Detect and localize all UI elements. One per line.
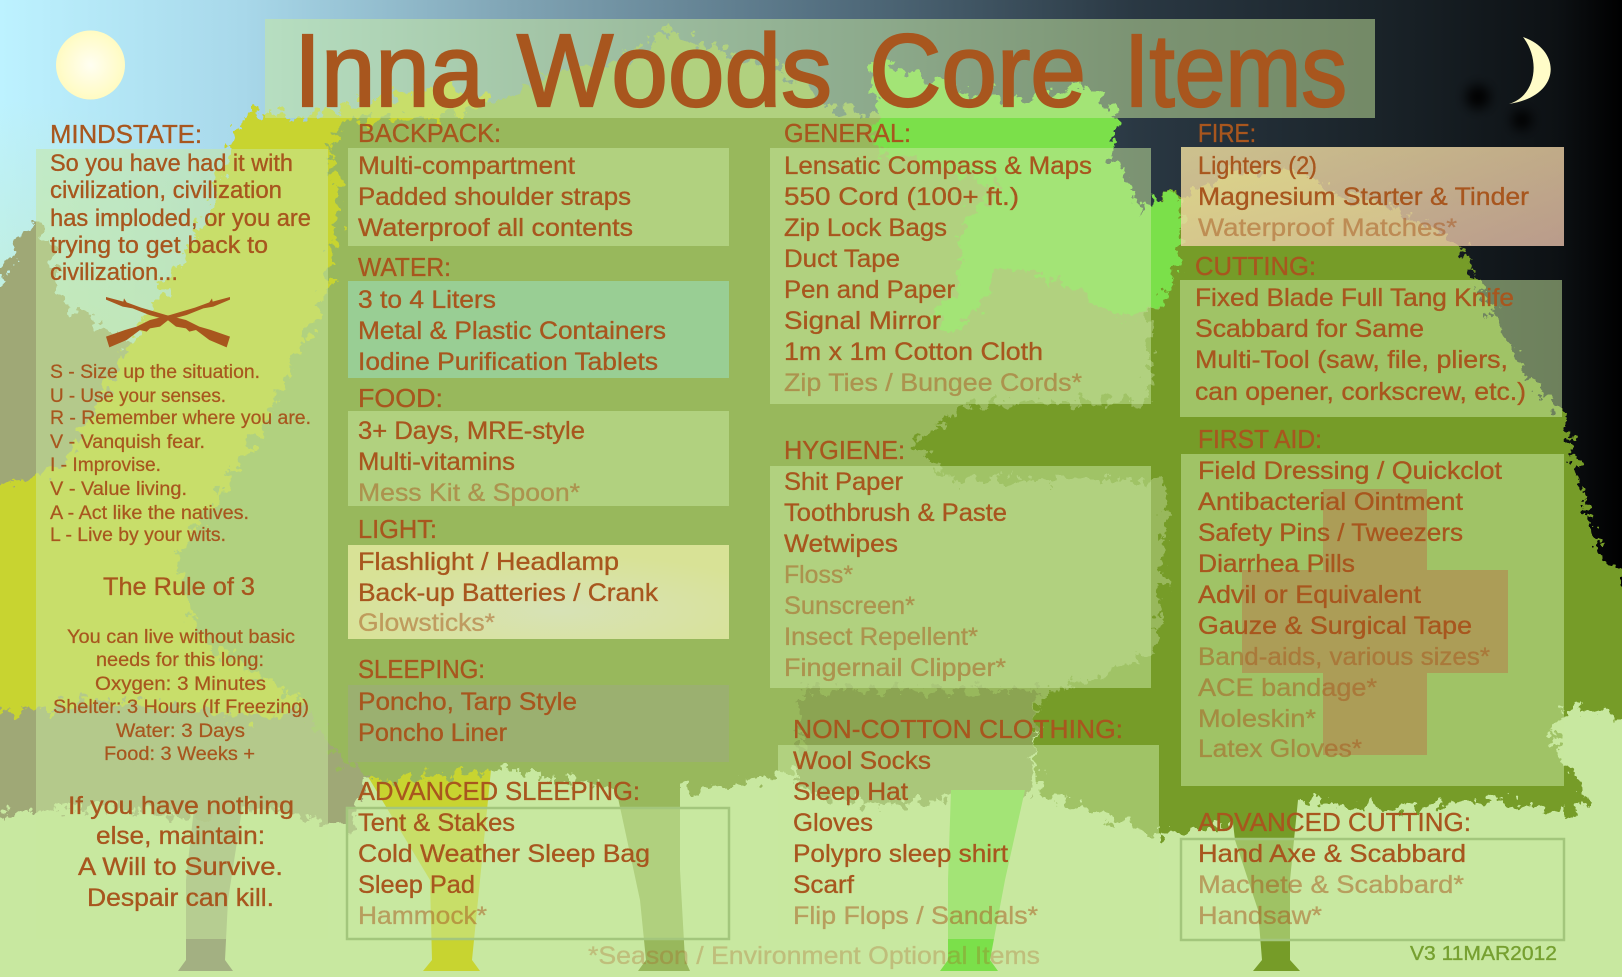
- panel: water: Iodine Purification Tablets: [358, 348, 658, 376]
- title: Items: [1124, 13, 1347, 128]
- version stamp: V3 11MAR2012: [1410, 943, 1557, 965]
- panel: non-cotton clothing: [778, 714, 1159, 939]
- text: intro: [50, 150, 311, 286]
- panel: food: Mess Kit & Spoon*: [358, 479, 580, 507]
- text: will to survive: If you have nothing: [68, 792, 294, 820]
- tree: grey lower canopy: [0, 700, 372, 830]
- panel: first aid: Moleskin*: [1198, 705, 1316, 733]
- panel: water: [348, 252, 729, 378]
- text: SURVIVAL mnemonic: L - Live by your wits.: [50, 525, 226, 546]
- icon: first aid cross: [1242, 489, 1508, 755]
- panel: advanced sleeping: Tent & Stakes: [358, 809, 515, 837]
- panel: non-cotton clothing: Flip Flops / Sandals*: [793, 902, 1038, 930]
- panel: cutting: [1180, 251, 1562, 417]
- panel: sleeping: Poncho Liner: [358, 719, 507, 747]
- panel: first aid: Advil or Equivalent: [1198, 581, 1421, 609]
- panel: water: WATER:: [358, 252, 451, 282]
- panel: water: Metal & Plastic Containers: [358, 317, 666, 345]
- panel: backpack: BACKPACK:: [358, 118, 501, 148]
- tree: olive dark lower foliage: [800, 690, 1036, 805]
- text: will to survive: else, maintain:: [96, 822, 265, 850]
- panel: non-cotton clothing: Gloves: [793, 809, 873, 837]
- panel: first aid: Field Dressing / Quickclot: [1198, 457, 1502, 485]
- panel: hygiene: Sunscreen*: [784, 592, 915, 620]
- panel: fire: Magnesium Starter & Tinder: [1198, 183, 1529, 211]
- panel: general: Signal Mirror: [784, 307, 941, 335]
- tree: dark green mid foliage: [915, 270, 1182, 480]
- panel: advanced cutting: Hand Axe & Scabbard: [1198, 840, 1466, 868]
- text: intro: civilization, civilization: [50, 177, 282, 204]
- icon: sun: [56, 30, 125, 100]
- panel: hygiene: Floss*: [784, 561, 853, 589]
- text: SURVIVAL mnemonic: R - Remember where you are.: [50, 408, 311, 429]
- panel: first aid: [1181, 424, 1564, 786]
- panel: fire: [1181, 118, 1564, 246]
- panel: hygiene: Shit Paper: [784, 468, 903, 496]
- panel: cutting: can opener, corkscrew, etc.): [1195, 378, 1526, 406]
- tree: olive: [175, 30, 1172, 971]
- text: rule of 3: [53, 627, 309, 765]
- panel: advanced cutting: Machete & Scabbard*: [1198, 871, 1464, 899]
- text: will to survive: A Will to Survive.: [78, 853, 283, 881]
- panel: sleeping: SLEEPING:: [358, 654, 485, 684]
- panel: non-cotton clothing: Scarf: [793, 871, 854, 899]
- panel: sleeping: Poncho, Tarp Style: [358, 688, 577, 716]
- panel: advanced sleeping: ADVANCED SLEEPING:: [358, 776, 640, 806]
- text: rule of 3: Water: 3 Days: [116, 721, 245, 742]
- heading: mindstate: MINDSTATE:: [50, 119, 202, 149]
- text: SURVIVAL mnemonic: S - Size up the situation.: [50, 362, 260, 383]
- panel: sleeping: [348, 654, 729, 762]
- panel: light: Flashlight / Headlamp: [358, 548, 619, 576]
- panel: first aid: FIRST AID:: [1198, 424, 1322, 454]
- panel: general: Zip Lock Bags: [784, 214, 947, 242]
- panel: hygiene: Fingernail Clipper*: [784, 654, 1006, 682]
- panel: cutting: Multi-Tool (saw, file, pliers,: [1195, 346, 1508, 374]
- text: SURVIVAL mnemonic: V - Value living.: [50, 479, 187, 500]
- panel: backpack: Padded shoulder straps: [358, 183, 631, 211]
- panel: mindstate: [36, 119, 328, 939]
- text: rule of 3: You can live without basic: [67, 627, 295, 648]
- panel: advanced sleeping: Hammock*: [358, 902, 487, 930]
- panel: general: 1m x 1m Cotton Cloth: [784, 338, 1043, 366]
- panel: general: [770, 118, 1151, 404]
- panel: non-cotton clothing: NON-COTTON CLOTHING:: [793, 714, 1123, 744]
- panel: advanced cutting: Handsaw*: [1198, 902, 1322, 930]
- text: intro: trying to get back to: [50, 232, 268, 259]
- footnote: season optional items: *Season / Environment Optional Items: [588, 942, 1040, 970]
- title: Woods: [517, 13, 832, 128]
- tree: dark green: [1030, 168, 1622, 971]
- panel: backpack: Multi-compartment: [358, 152, 575, 180]
- panel: first aid: Gauze & Surgical Tape: [1198, 612, 1472, 640]
- text: rule of 3: needs for this long:: [96, 650, 264, 671]
- text: will to survive: Despair can kill.: [87, 884, 274, 912]
- panel: fire: FIRE:: [1198, 118, 1256, 148]
- panel: advanced cutting: ADVANCED CUTTING:: [1198, 807, 1471, 837]
- panel: general: Lensatic Compass & Maps: [784, 152, 1092, 180]
- panel: hygiene: [770, 435, 1151, 688]
- panel: first aid: Diarrhea Pills: [1198, 550, 1355, 578]
- panel: hygiene: Wetwipes: [784, 530, 898, 558]
- text: rule of 3: Oxygen: 3 Minutes: [95, 674, 266, 695]
- panel: light: LIGHT:: [358, 514, 437, 544]
- panel: food: Multi-vitamins: [358, 448, 515, 476]
- text: intro: has imploded, or you are: [50, 205, 311, 232]
- text: will to survive: [68, 792, 294, 912]
- panel: light: [348, 514, 729, 639]
- text: SURVIVAL mnemonic: V - Vanquish fear.: [50, 432, 205, 453]
- panel: advanced cutting: [1181, 807, 1564, 940]
- text: SURVIVAL mnemonic: A - Act like the natives.: [50, 503, 249, 524]
- text: SURVIVAL mnemonic: [50, 362, 311, 546]
- tree: yellow: [0, 85, 530, 971]
- dark clouds near moon: [1466, 85, 1532, 130]
- panel: advanced sleeping: Sleep Pad: [358, 871, 475, 899]
- panel: cutting: CUTTING:: [1195, 251, 1316, 281]
- icon: crescent moon: [1509, 37, 1551, 104]
- text: rule of 3: Food: 3 Weeks +: [104, 744, 255, 765]
- panel: water: 3 to 4 Liters: [358, 286, 496, 314]
- panel: general: Zip Ties / Bungee Cords*: [784, 369, 1082, 397]
- panel: advanced sleeping: [347, 776, 729, 939]
- ground: [0, 700, 1622, 977]
- panel: non-cotton clothing: Wool Socks: [793, 747, 931, 775]
- panel: cutting: Scabbard for Same: [1195, 315, 1424, 343]
- text: rule of 3: Shelter: 3 Hours (If Freezing): [53, 697, 309, 718]
- title: [265, 13, 1375, 128]
- title: Core: [869, 13, 1086, 128]
- panel: backpack: [348, 118, 729, 246]
- panel: general: GENERAL:: [784, 118, 911, 148]
- panel: general: Pen and Paper: [784, 276, 955, 304]
- panel: food: [348, 383, 729, 507]
- panel: non-cotton clothing: Sleep Hat: [793, 778, 908, 806]
- panel: first aid: ACE bandage*: [1198, 674, 1377, 702]
- tree: bright green: [870, 60, 1182, 971]
- text: intro: civilization...: [50, 259, 178, 286]
- panel: cutting: Fixed Blade Full Tang Knife: [1195, 284, 1514, 312]
- tree: grey: [0, 220, 370, 971]
- panel: first aid: Band-aids, various sizes*: [1198, 643, 1490, 671]
- panel: advanced sleeping: Cold Weather Sleep Bag: [358, 840, 650, 868]
- panel: light: Back-up Batteries / Crank: [358, 579, 659, 607]
- panel: backpack: Waterproof all contents: [358, 214, 633, 242]
- text: intro: So you have had it with: [50, 150, 293, 177]
- panel: hygiene: Toothbrush & Paste: [784, 499, 1007, 527]
- panel: hygiene: Insect Repellent*: [784, 623, 978, 651]
- panel: food: FOOD:: [358, 383, 443, 413]
- text: SURVIVAL mnemonic: I - Improvise.: [50, 455, 161, 476]
- panel: hygiene: HYGIENE:: [784, 435, 905, 465]
- panel: non-cotton clothing: Polypro sleep shirt: [793, 840, 1008, 868]
- heading: the rule of 3: The Rule of 3: [103, 573, 255, 601]
- icon: crossed rifles: [106, 297, 230, 347]
- panel: fire: Waterproof Matches*: [1198, 214, 1457, 242]
- panel: general: Duct Tape: [784, 245, 900, 273]
- panel: fire: Lighters (2): [1198, 152, 1317, 180]
- panel: first aid: Latex Gloves*: [1198, 735, 1362, 763]
- panel: first aid: Antibacterial Ointment: [1198, 488, 1463, 516]
- text: SURVIVAL mnemonic: U - Use your senses.: [50, 386, 226, 407]
- title: Inna: [294, 13, 485, 128]
- panel: light: Glowsticks*: [358, 609, 495, 637]
- panel: general: 550 Cord (100+ ft.): [784, 183, 1019, 211]
- panel: first aid: Safety Pins / Tweezers: [1198, 519, 1463, 547]
- panel: food: 3+ Days, MRE-style: [358, 417, 585, 445]
